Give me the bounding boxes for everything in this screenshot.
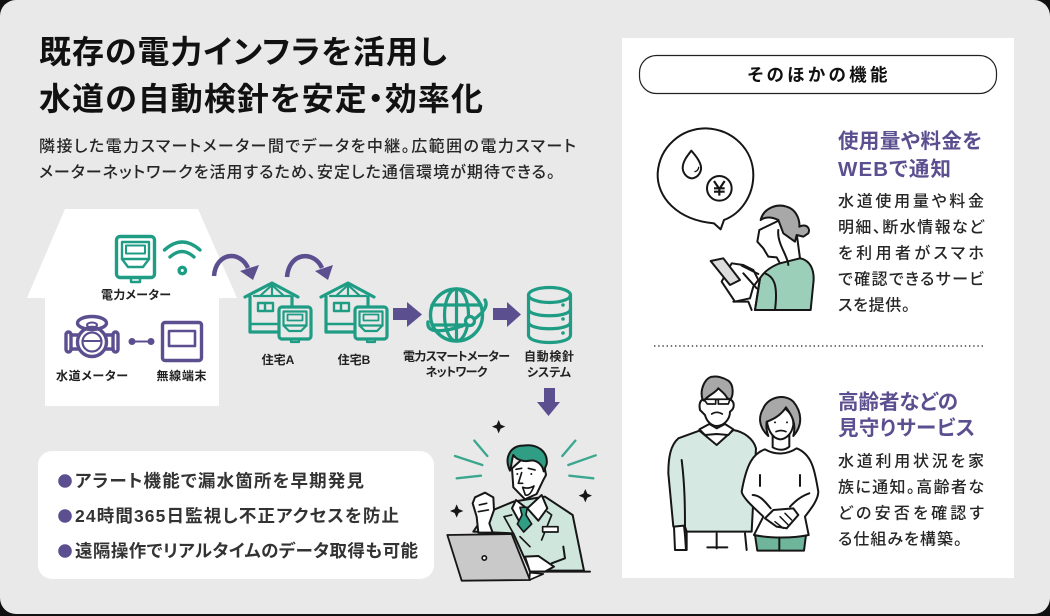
icon: globe network [428, 289, 486, 341]
icon: home A [245, 283, 311, 342]
divider [654, 345, 984, 347]
label: home B: 住宅B [338, 352, 371, 367]
heading pill: そのほかの機能 [748, 65, 888, 85]
feature 1 body: 明細、断水情報など [838, 218, 985, 236]
label: network: ネットワーク [425, 365, 488, 379]
illustration: woman checking phone with speech bubble [658, 128, 814, 310]
feature 1 text [838, 130, 985, 314]
icon: electricity meter [116, 236, 154, 282]
feature 2 heading [838, 391, 975, 440]
heading pill [640, 56, 996, 94]
icon: database [528, 288, 570, 342]
panel: other features [622, 38, 1014, 578]
label: auto meter reading system: 自動検針 [524, 348, 574, 364]
connector: meter to terminal [128, 338, 154, 345]
benefit 1: アラート機能で漏水箇所を早期発見 [75, 471, 364, 491]
feature 1 body: で確認できるサービ [838, 270, 984, 288]
label: wireless terminal: 無線端末 [156, 368, 206, 383]
panel: benefits [38, 451, 434, 579]
label: home A: 住宅A [262, 352, 295, 367]
title: 水道の自動検針を安定・効率化 [39, 81, 483, 117]
feature 1 heading [838, 130, 982, 181]
icon: water meter [66, 316, 118, 356]
feature 2 body: どの安否を確認す [838, 504, 984, 522]
feature 1 body: スを提供。 [838, 296, 910, 314]
feature 1 body [838, 192, 985, 314]
feature 1 body: 水道使用量や料金 [838, 192, 984, 210]
label: auto meter reading system [524, 348, 574, 380]
title [39, 34, 483, 117]
feature 2 body: る仕組みを構築。 [838, 530, 962, 548]
illustration: operator with laptop [447, 420, 596, 581]
label: auto meter reading system: システム [527, 366, 571, 380]
feature 1 heading: 使用量や料金を [838, 130, 982, 153]
intro text: 隣接した電力スマートメーター間でデータを中継。広範囲の電力スマート [39, 136, 576, 156]
arrow: to network [393, 302, 422, 327]
feature 2 heading: 高齢者などの [838, 391, 958, 414]
title: 既存の電力インフラを活用し [39, 34, 447, 70]
label: network: 電力スマートメーター [403, 348, 510, 364]
intro text [39, 136, 576, 182]
feature 1 body: を利用者がスマホ [838, 244, 984, 262]
benefit 2: 24時間365日監視し不正アクセスを防止 [75, 506, 399, 526]
feature 2 body: 水道利用状況を家 [838, 452, 984, 470]
label: water meter: 水道メーター [56, 368, 128, 383]
feature 2 body [838, 452, 984, 548]
arrow: house to home A [214, 256, 259, 280]
icon: wifi [164, 242, 200, 274]
arrow: home A to home B [287, 256, 333, 280]
icon: home B [321, 283, 387, 342]
arrow: to operator [537, 388, 560, 416]
arrow: to system [493, 302, 521, 327]
illustration: elderly couple [668, 376, 818, 551]
feature 2 text [838, 391, 984, 548]
label: electricity meter: 電力メーター [101, 287, 171, 302]
label: network [403, 348, 510, 379]
feature 1 heading: WEBで通知 [838, 158, 951, 181]
feature 2 heading: 見守りサービス [838, 417, 975, 440]
benefit 3: 遠隔操作でリアルタイムのデータ取得も可能 [75, 541, 418, 561]
house panel [27, 209, 237, 406]
intro text: メーターネットワークを活用するため、安定した通信環境が期待できる。 [39, 162, 555, 182]
icon: wireless terminal [162, 322, 202, 360]
feature 2 body: 族に通知。高齢者な [838, 478, 984, 496]
